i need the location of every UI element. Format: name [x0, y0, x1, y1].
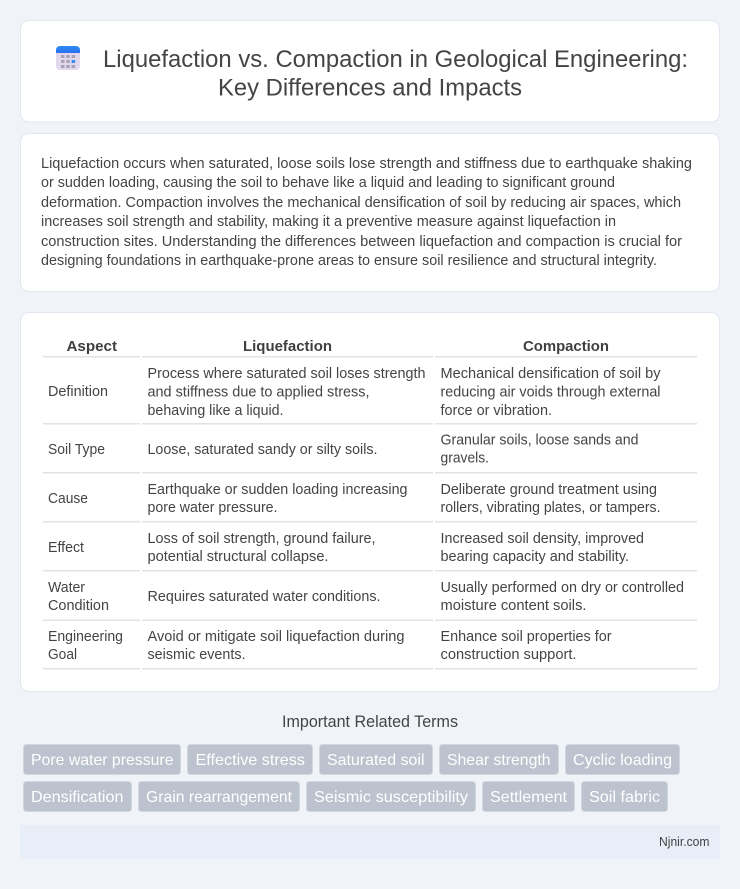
row: engineering goal: seismic events. [148, 647, 246, 663]
tag: seismic susceptibility [306, 782, 476, 812]
row: soil type [48, 432, 638, 466]
tag: cyclic loading: Cyclic loading [573, 752, 672, 769]
row: soil type: Granular soils, loose sands and [440, 432, 638, 448]
row: definition [48, 366, 661, 419]
text block: introduction paragraph: Liquefaction occurs when saturated, loose soils lose strength and stiffness due to earthquake shaking [41, 156, 692, 172]
row: definition: force or vibration. [440, 403, 552, 419]
panel: introduction [20, 134, 720, 292]
row: definition: and stiffness due to applied stress, [148, 384, 370, 400]
row: soil type: gravels. [440, 450, 489, 466]
row: definition: reducing air voids through external [440, 384, 660, 400]
title: Key Differences and Impacts [218, 74, 522, 102]
row: engineering goal [48, 629, 612, 663]
row: cause: Deliberate ground treatment using [440, 482, 657, 498]
tag: soil fabric [582, 782, 668, 812]
tag: saturated soil [320, 744, 432, 774]
text block: introduction paragraph: deformation. Compaction involves the mechanical densification of soil by reducing air spaces, which [41, 195, 681, 211]
row: cause: rollers, vibrating plates, or tampers. [440, 500, 660, 516]
panel: comparison table [20, 312, 720, 692]
row: effect: Increased soil density, improved [440, 531, 644, 547]
title [103, 46, 688, 102]
row: definition: behaving like a liquid. [148, 403, 284, 419]
row: effect: Loss of soil strength, ground failure, [148, 531, 376, 547]
tag: grain rearrangement [138, 782, 300, 812]
text block: introduction paragraph: construction sites. Understanding the differences between liquefaction and compaction is crucial for [41, 234, 682, 250]
tag: saturated soil: Saturated soil [327, 752, 424, 769]
row: water condition: moisture content soils. [440, 598, 586, 614]
row: water condition: Usually performed on dry or controlled [440, 580, 684, 596]
row: cause: Cause [48, 491, 88, 507]
row: definition: Definition [48, 384, 108, 400]
row: soil type: Loose, saturated sandy or silty soils. [148, 442, 378, 458]
row: effect: bearing capacity and stability. [440, 549, 629, 565]
row: engineering goal: Enhance soil properties for [440, 629, 612, 645]
row: effect: potential structural collapse. [148, 549, 328, 565]
footer [20, 825, 720, 859]
row: effect [48, 531, 644, 565]
row: water condition: Water [48, 580, 85, 596]
tag: pore water pressure: Pore water pressure [31, 752, 174, 769]
tag: shear strength [440, 744, 558, 774]
row: cause: pore water pressure. [148, 500, 278, 516]
row: definition: Mechanical densification of soil by [440, 366, 661, 382]
row: definition: Process where saturated soil loses strength [148, 366, 426, 382]
footer: Njnir.com [659, 835, 710, 849]
tag: cyclic loading [566, 744, 680, 774]
tag: grain rearrangement: Grain rearrangement [146, 789, 293, 806]
row: effect: Effect [48, 540, 84, 556]
tag: effective stress [188, 744, 312, 774]
tag: seismic susceptibility: Seismic susceptibility [314, 789, 468, 806]
row: engineering goal: Engineering [48, 629, 123, 645]
row: water condition: Condition [48, 598, 109, 614]
text block: introduction paragraph: increases soil strength and stability, making it a preventive measure against liquefaction in [41, 214, 616, 230]
row: engineering goal: Goal [48, 647, 77, 663]
tag: densification: Densification [31, 789, 124, 806]
tag: shear strength: Shear strength [447, 752, 550, 769]
tag: soil fabric: Soil fabric [589, 789, 660, 806]
row: engineering goal: construction support. [440, 647, 576, 663]
tag: effective stress: Effective stress [196, 752, 305, 769]
row: engineering goal: Avoid or mitigate soil liquefaction during [148, 629, 404, 645]
panel: title card [20, 20, 720, 122]
row: cause: Earthquake or sudden loading increasing [148, 482, 408, 498]
heading: important related terms: Important Related Terms [282, 713, 458, 731]
table header: Aspect [66, 338, 117, 355]
tag: settlement [482, 782, 574, 812]
tag: pore water pressure [24, 744, 180, 774]
table header: Compaction [523, 338, 609, 355]
row: soil type: Soil Type [48, 442, 105, 458]
table header: Liquefaction [243, 338, 332, 355]
row: water condition [48, 580, 684, 614]
panel: related terms tags [24, 744, 680, 812]
row: water condition: Requires saturated water conditions. [148, 589, 380, 605]
text block: introduction paragraph: designing foundations in earthquake-prone areas to ensure soil resilience and structural integrity. [41, 253, 657, 269]
title: Liquefaction vs. Compaction in Geological Engineering: [103, 46, 688, 73]
row: cause [48, 482, 660, 516]
text block: introduction paragraph: or sudden loading, causing the soil to behave like a liquid and leading to significant ground [41, 175, 615, 191]
tag: densification [24, 782, 132, 812]
icon: calendar [56, 46, 80, 70]
tag: settlement: Settlement [490, 789, 568, 806]
text block: introduction paragraph [41, 156, 692, 269]
table header [66, 338, 609, 355]
